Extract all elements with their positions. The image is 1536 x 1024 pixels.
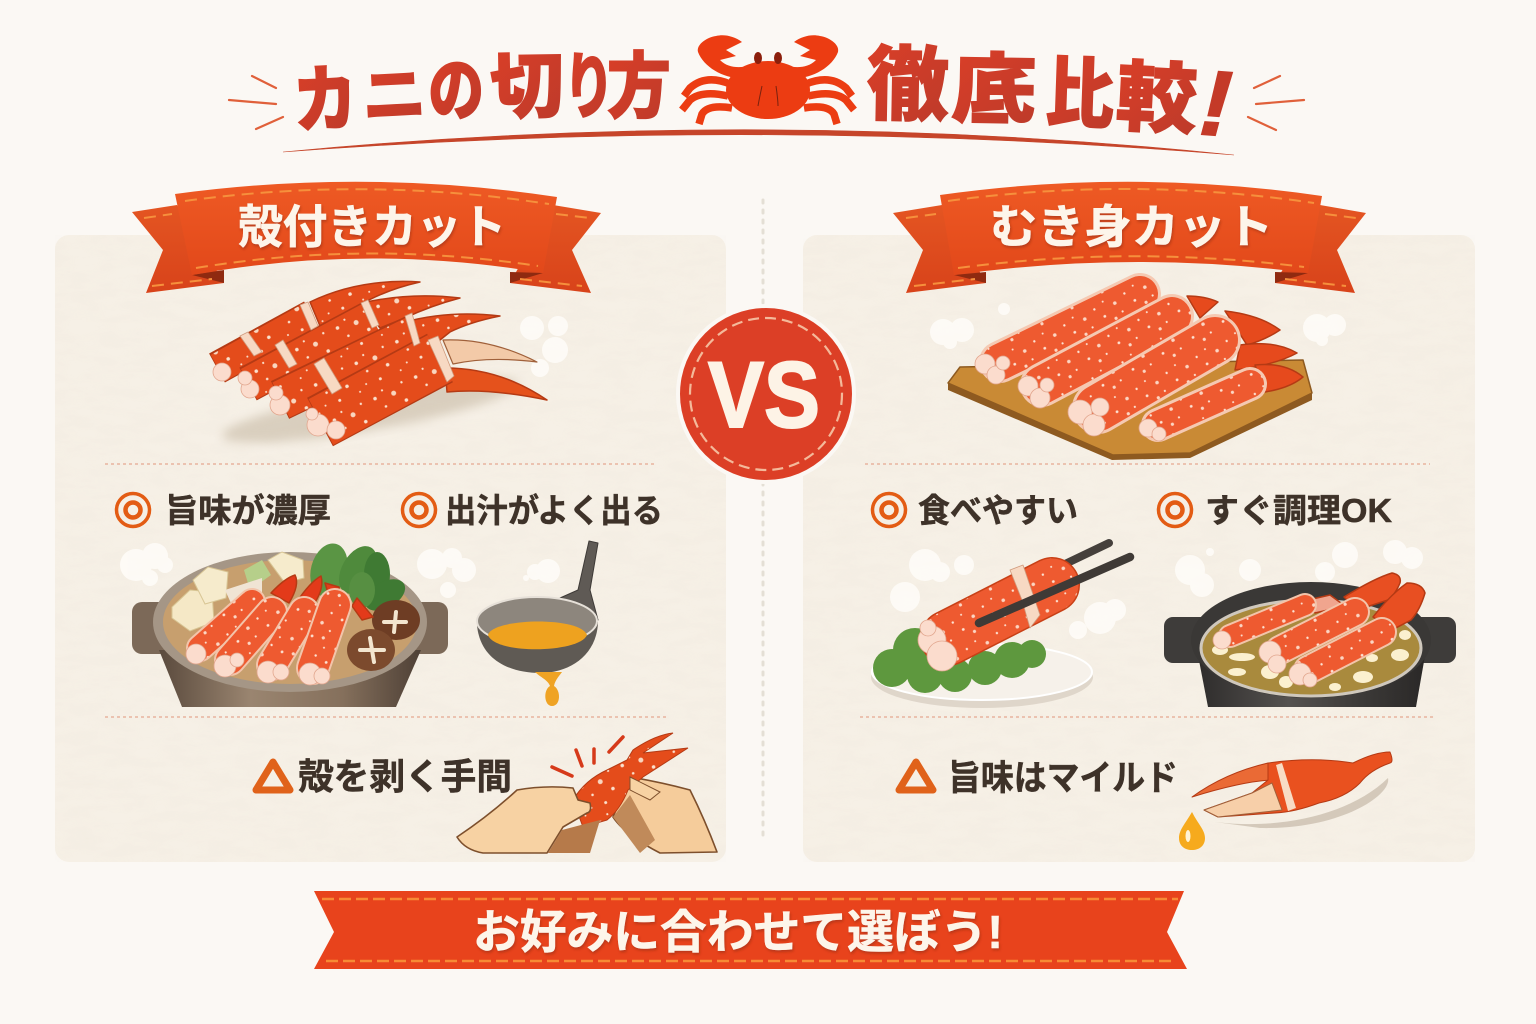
title text left: カ bbox=[291, 57, 359, 143]
label: 殻を剥く手間 bbox=[298, 756, 512, 797]
ribbon: peeled cut bbox=[893, 182, 1366, 293]
banner text: お好みに合わせて選ぼう! bbox=[473, 906, 1003, 958]
VS badge bbox=[676, 304, 856, 484]
icon: double circle bbox=[116, 494, 150, 526]
ribbon: shell-on cut bbox=[132, 182, 601, 293]
title text left: ニ bbox=[360, 59, 428, 133]
icon: triangle bbox=[899, 762, 933, 790]
title text right: 比 bbox=[1044, 51, 1116, 139]
title text right bbox=[866, 40, 1235, 156]
illustration: chopsticks lifting meat bbox=[871, 543, 1130, 708]
label: 食べやすい bbox=[918, 492, 1078, 529]
illustration: ladle with broth bbox=[477, 541, 598, 706]
ribbon label: むき身カット bbox=[990, 201, 1273, 253]
drawback: shell peeling effort bbox=[256, 756, 512, 797]
ribbon label: 殻付きカット bbox=[238, 201, 506, 253]
panel: peeled cut bbox=[803, 235, 1475, 862]
panel: shell-on cut bbox=[55, 235, 726, 862]
illustration: crab claw with drop bbox=[1179, 752, 1392, 850]
feature: rich flavour bbox=[116, 492, 331, 529]
title underline bbox=[283, 130, 1234, 155]
title text right: 徹 bbox=[866, 40, 950, 132]
title accent lines right bbox=[1248, 76, 1304, 130]
feature: good broth bbox=[402, 492, 663, 529]
icon: double circle bbox=[872, 494, 906, 526]
drawback: mild flavour bbox=[899, 759, 1178, 798]
divider: centre dotted line bbox=[762, 200, 764, 840]
title text left: 切 bbox=[489, 46, 565, 128]
title text left: り bbox=[564, 48, 614, 128]
title accent lines left bbox=[229, 76, 283, 129]
label: 旨味はマイルド bbox=[948, 759, 1178, 798]
VS text: VS bbox=[708, 342, 820, 447]
feature: ready to cook bbox=[1158, 492, 1392, 529]
label: 旨味が濃厚 bbox=[165, 492, 331, 529]
title text right: 底 bbox=[950, 47, 1037, 134]
title text left bbox=[291, 46, 671, 143]
bottom banner bbox=[314, 891, 1187, 969]
title text left: 方 bbox=[607, 47, 671, 128]
illustration: claypot with peeled legs bbox=[1164, 540, 1456, 707]
label: すぐ調理OK bbox=[1205, 492, 1392, 529]
icon: double circle bbox=[402, 494, 436, 526]
illustration: peeled legs on board bbox=[930, 294, 1346, 460]
title text left: の bbox=[427, 52, 485, 131]
title text right: 較 bbox=[1114, 54, 1200, 144]
icon: triangle bbox=[256, 762, 290, 790]
title text right: ! bbox=[1197, 52, 1235, 156]
illustration: hot pot bbox=[120, 539, 476, 707]
feature: easy to eat bbox=[872, 492, 1078, 529]
label: 出汁がよく出る bbox=[445, 492, 663, 529]
title bbox=[229, 35, 1304, 156]
icon: crab bbox=[682, 35, 854, 124]
illustration: shell-on crab legs bbox=[213, 281, 568, 456]
illustration: hands peeling crab bbox=[457, 733, 717, 853]
icon: double circle bbox=[1158, 494, 1192, 526]
